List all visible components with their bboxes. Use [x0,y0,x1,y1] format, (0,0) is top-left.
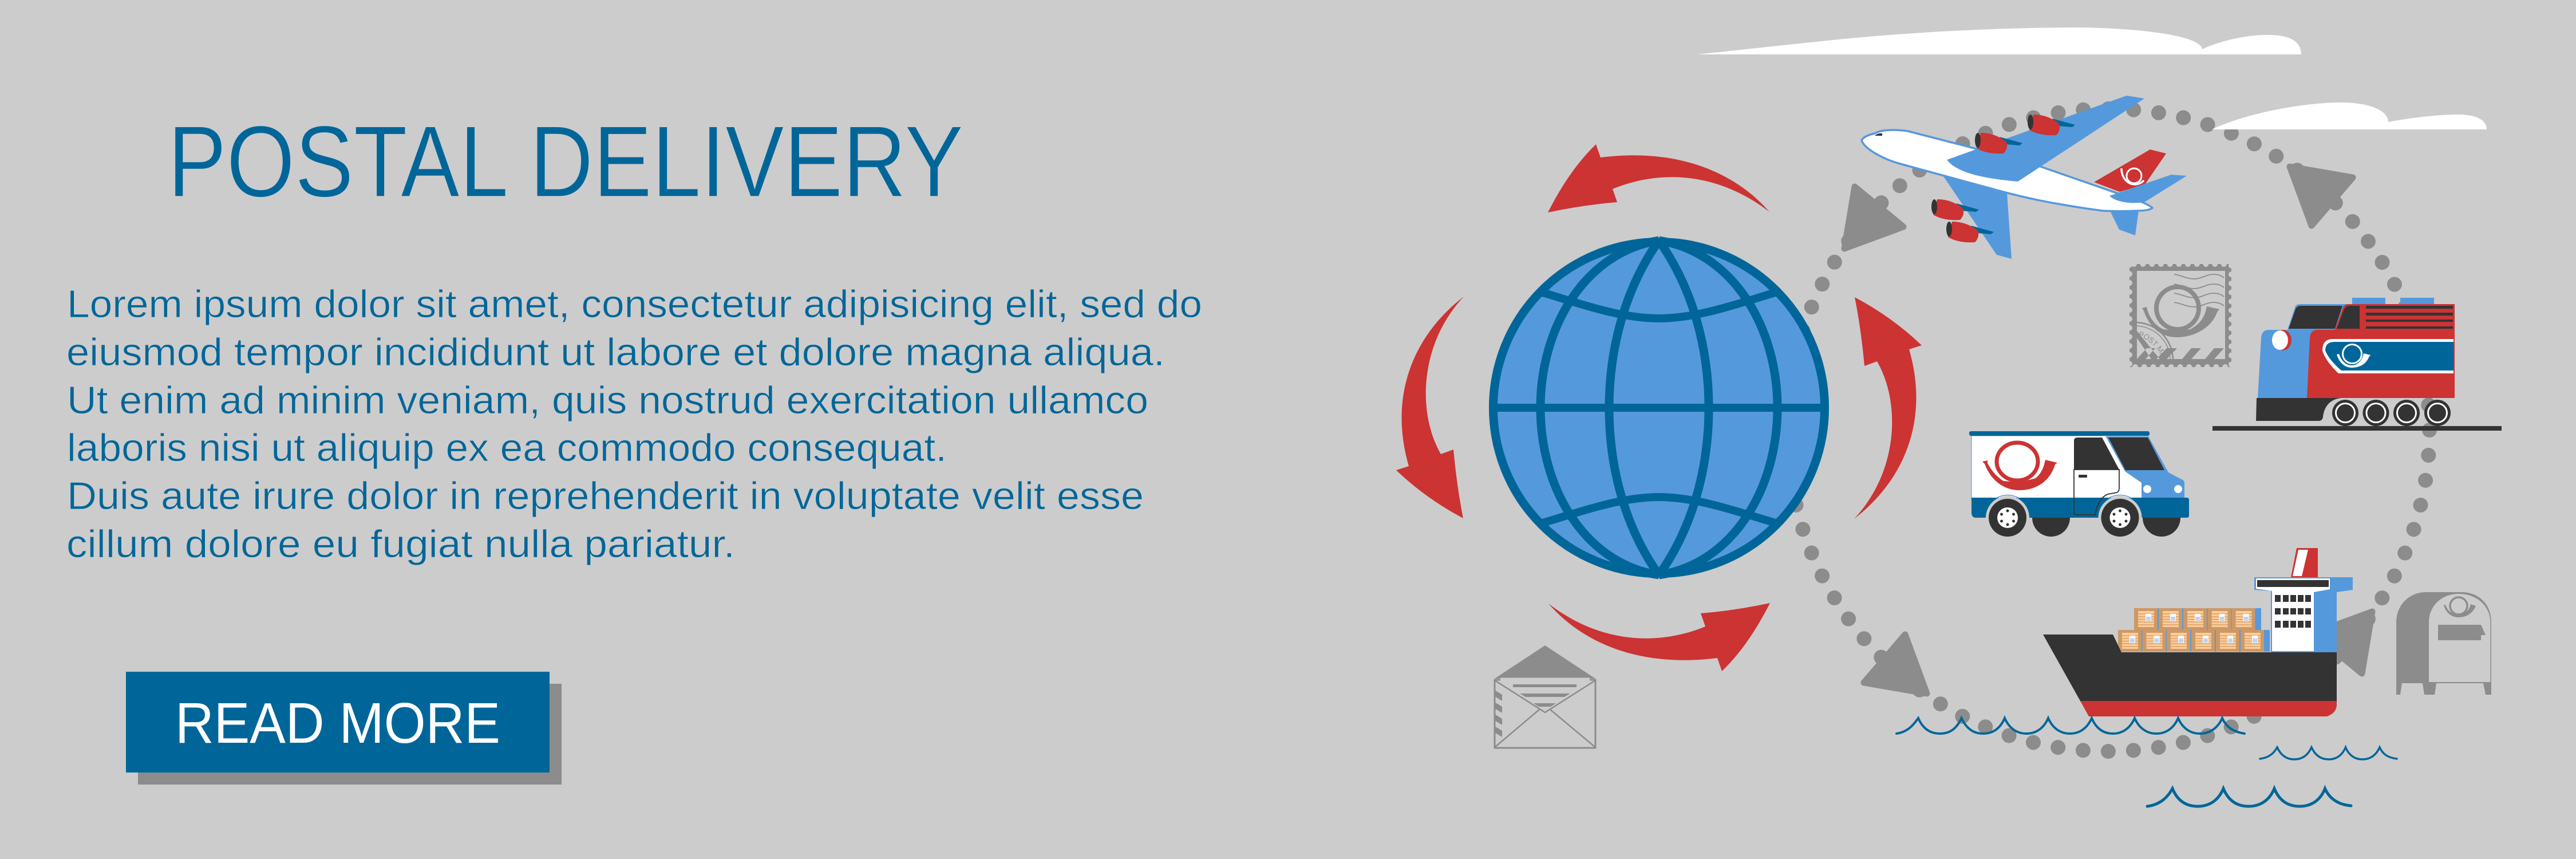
cloud: top [1697,27,2301,54]
cloud: right [2212,103,2487,129]
read more button: READ MORE [175,691,500,755]
read more button [126,672,562,785]
cargo ship [2043,548,2353,716]
ring arrowhead: top left [1844,187,1903,249]
red arrow: bottom [1548,603,1770,671]
icon: postage stamp: POST MAIL [2140,332,2164,354]
ring arrowhead: bottom left [1864,635,1927,693]
body text: Lorem ipsum dolor sit amet, consectetur adipisicing elit, sed do [67,282,1202,326]
body text: eiusmod tempor incididunt ut labore et dolore magna aliqua. [66,330,1165,374]
train [2212,298,2502,431]
globe [1493,241,1825,575]
icon: envelope [1495,645,1595,748]
waves: bottom [2147,789,2351,806]
icon: mailbox [2396,592,2491,695]
waves: under ship [1897,718,2245,734]
airplane [1862,96,2187,259]
body text: laboris nisi ut aliquip ex ea commodo consequat. [67,426,947,470]
title: POSTAL DELIVERY [168,105,963,218]
waves: right [2260,747,2397,759]
dotted delivery ring [1787,109,2429,751]
ring arrowhead: top right [2290,167,2353,226]
icon: postage stamp [2129,264,2231,367]
delivery van [1969,431,2189,537]
red arrow: right [1854,297,1922,519]
ring arrowhead: bottom right [2313,612,2372,673]
body text [66,282,1202,566]
red arrow: left [1396,297,1464,518]
body text: cillum dolore eu fugiat nulla pariatur. [66,522,735,566]
red arrow: top [1548,144,1769,212]
body text: Duis aute irure dolor in reprehenderit in voluptate velit esse [67,474,1144,518]
body text: Ut enim ad minim veniam, quis nostrud exercitation ullamco [67,379,1148,422]
